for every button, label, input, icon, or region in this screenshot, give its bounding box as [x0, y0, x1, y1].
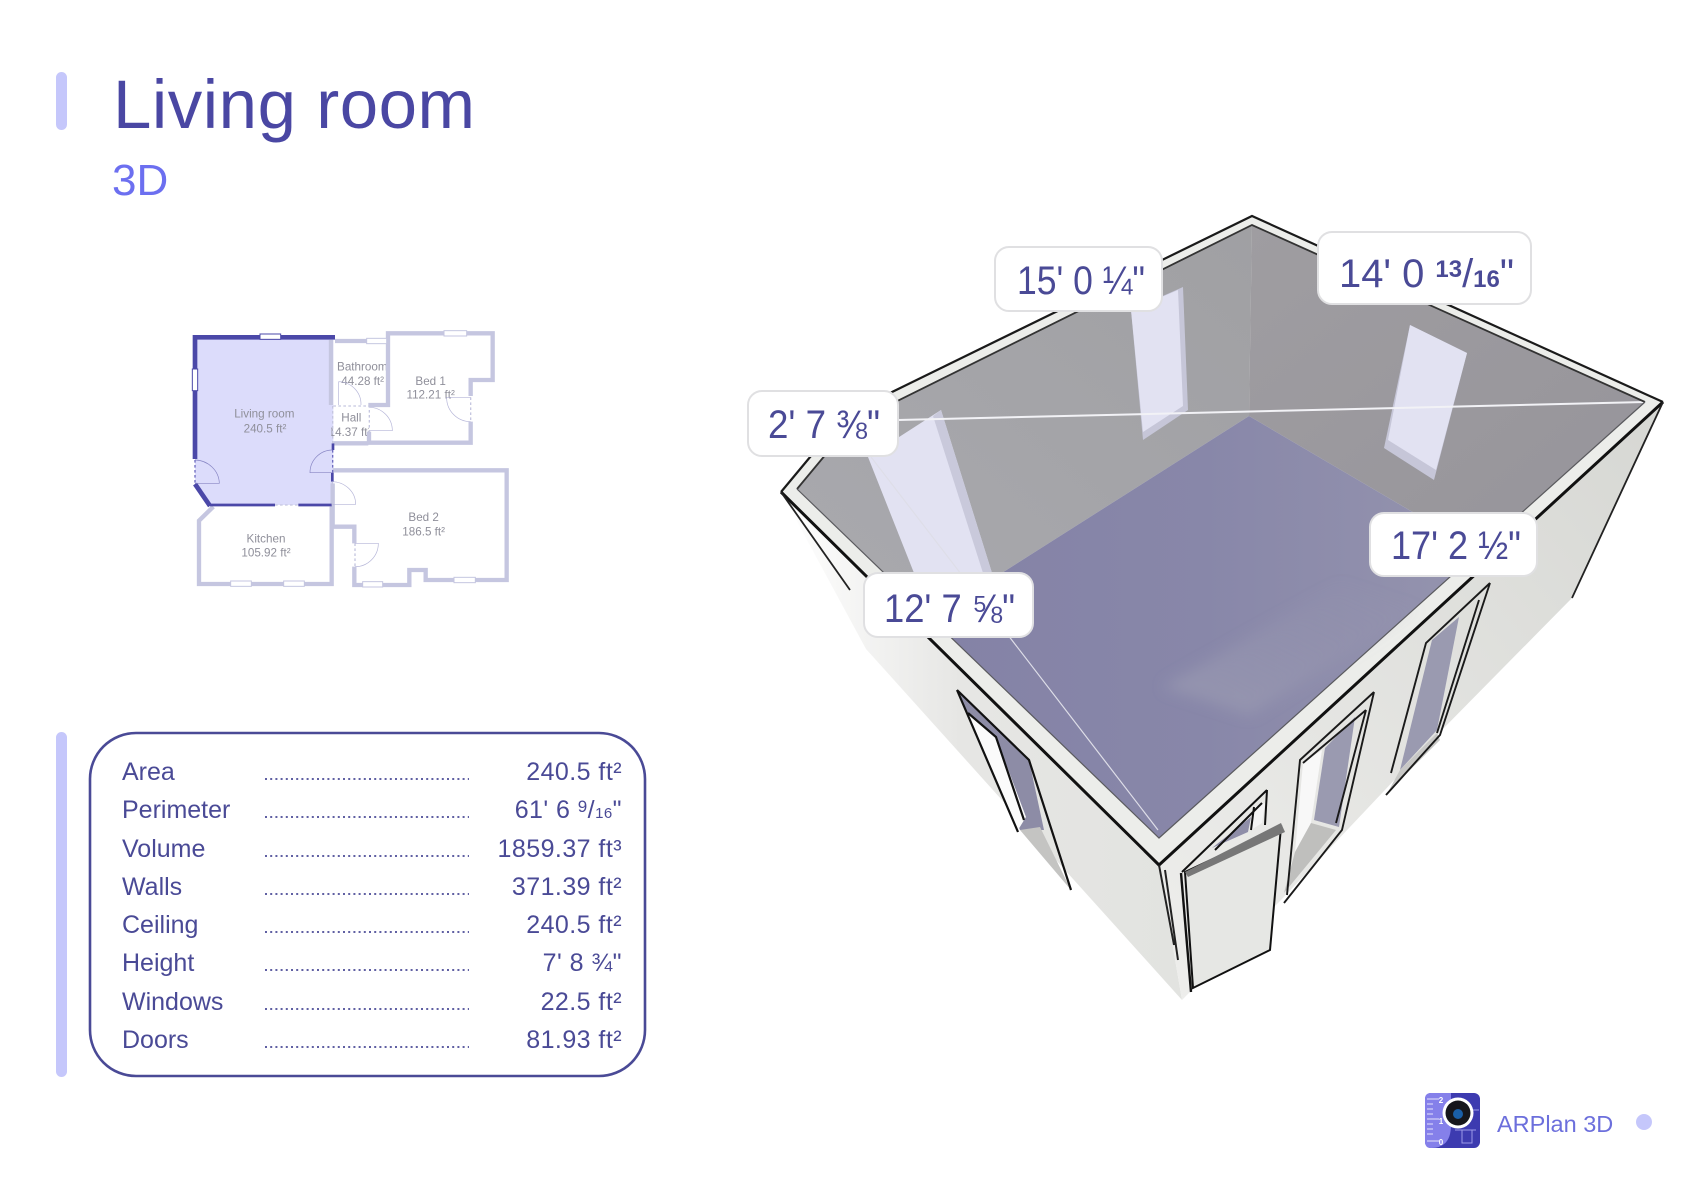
- living room fill: [195, 337, 333, 505]
- back wall window right: [1384, 325, 1467, 480]
- room labels: Bathroom: [337, 361, 388, 374]
- room labels: [234, 361, 455, 560]
- left wall window: [957, 690, 1071, 890]
- stats panel: [90, 733, 645, 1076]
- back right wall: [1249, 225, 1645, 551]
- room labels: Kitchen: [247, 532, 285, 545]
- room labels: 240.5 ft²: [244, 423, 286, 436]
- row: perimeter: Perimeter: [122, 796, 230, 824]
- room labels: Bed 2: [408, 511, 439, 524]
- label: 2' 7 3/8": [748, 391, 898, 456]
- title accent bar: [56, 72, 67, 130]
- row: doors: Doors: [122, 1026, 189, 1054]
- row: windows: [122, 988, 622, 1016]
- wall top surface: [781, 216, 1663, 865]
- 3D room model: [781, 216, 1663, 1000]
- floor: [931, 416, 1479, 838]
- label: 14' 0 13/16": /: [1462, 252, 1474, 296]
- label: 17' 2 1/2": 17' 2 ½": [1391, 524, 1521, 568]
- back wall window middle: [1131, 287, 1188, 440]
- app logo icon: [1425, 1093, 1480, 1148]
- row: height: Height: [122, 949, 194, 977]
- row: perimeter: 16": [595, 796, 622, 824]
- row: walls: [122, 873, 622, 901]
- row: perimeter: 61' 6: [515, 796, 570, 824]
- row: perimeter: 9: [578, 797, 588, 816]
- row: area: Area: [122, 758, 175, 786]
- wall outlines: [781, 216, 1663, 960]
- label: 2' 7 3/8": 2' 7 ⅜": [768, 403, 880, 447]
- row: ceiling: 240.5 ft²: [526, 911, 622, 939]
- label: 15' 0 1/4": [995, 247, 1162, 311]
- label: 12' 7 5/8": 12' 7 ⅝": [884, 587, 1015, 631]
- room labels: Living room: [234, 407, 294, 420]
- floor light wedge: [1163, 585, 1420, 715]
- measurement lines: [871, 402, 1645, 830]
- doors: [195, 382, 471, 567]
- back wall window left: [868, 410, 992, 573]
- label: 14' 0 13/16": 16": [1473, 252, 1514, 296]
- table accent bar: [56, 732, 67, 1077]
- other room walls: [199, 331, 507, 587]
- page dot: [1636, 1114, 1652, 1130]
- subtitle: 3D: [112, 156, 168, 205]
- row: volume: [122, 835, 622, 863]
- row: doors: [122, 1026, 622, 1054]
- row: area: [122, 758, 622, 786]
- row: volume: 1859.37 ft³: [498, 835, 622, 863]
- title: Living room: [113, 66, 475, 143]
- row: ceiling: Ceiling: [122, 911, 198, 939]
- room labels: 186.5 ft²: [402, 526, 445, 539]
- label: 17' 2 1/2": [1370, 513, 1537, 576]
- app logo icon: 0: [1439, 1138, 1444, 1147]
- room labels: 112.21 ft²: [406, 388, 455, 401]
- right wall window far: [1386, 583, 1490, 795]
- row: walls: 371.39 ft²: [512, 873, 622, 901]
- room labels: 44.28 ft²: [341, 375, 384, 388]
- label: 15' 0 1/4": 15' 0 ¼": [1017, 259, 1145, 303]
- label: 12' 7 5/8": [864, 573, 1033, 637]
- row: perimeter: /: [588, 796, 595, 824]
- row: ceiling: [122, 911, 622, 939]
- row: height: 7' 8 ¾": [543, 949, 622, 977]
- row: height: [122, 949, 622, 977]
- label: 14' 0 13/16": 14' 0: [1339, 252, 1424, 296]
- row: doors: 81.93 ft²: [526, 1026, 622, 1054]
- exterior right wall: [1159, 402, 1663, 1000]
- living room walls: [192, 334, 335, 506]
- row: walls: Walls: [122, 873, 182, 901]
- room labels: Bed 1: [415, 375, 446, 388]
- row: area: 240.5 ft²: [526, 758, 622, 786]
- room labels: 105.92 ft²: [241, 547, 291, 560]
- row: volume: Volume: [122, 835, 205, 863]
- app logo icon: 1: [1439, 1117, 1444, 1126]
- panel border: [90, 733, 645, 1076]
- row: perimeter: [122, 796, 622, 824]
- label: 14' 0 13/16": [1318, 232, 1531, 304]
- app logo icon: 2: [1439, 1096, 1444, 1105]
- right wall window near door: [1284, 692, 1374, 903]
- room labels: Hall: [341, 412, 361, 425]
- back left wall: [797, 225, 1252, 618]
- row: windows: Windows: [122, 988, 223, 1016]
- door opening and door panel: [1181, 790, 1285, 992]
- label: 14' 0 13/16": 13: [1435, 256, 1462, 283]
- app name: ARPlan 3D: [1497, 1111, 1613, 1137]
- row: windows: 22.5 ft²: [541, 988, 622, 1016]
- exterior left wall: [781, 492, 1182, 1000]
- room labels: 14.37 ft²: [329, 426, 371, 439]
- floor plan: [192, 331, 507, 587]
